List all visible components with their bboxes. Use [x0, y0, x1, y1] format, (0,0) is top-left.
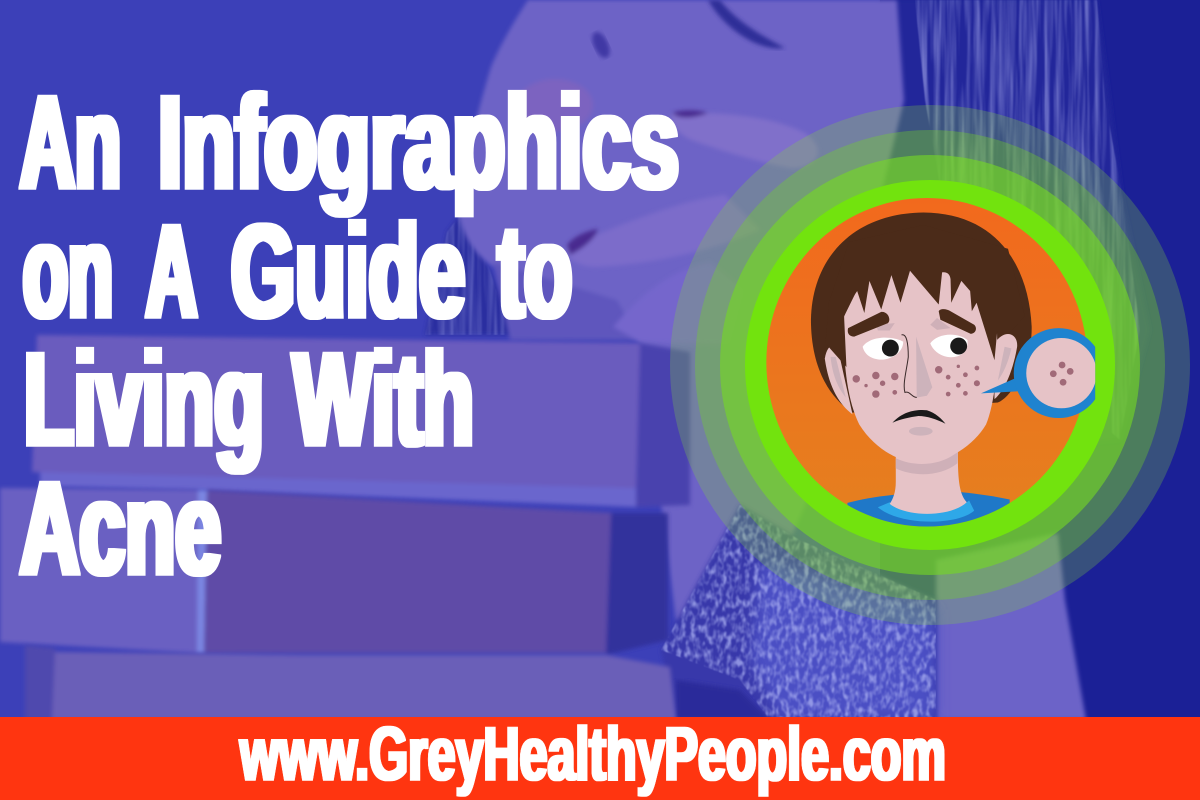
- title line 1: Infographics: [158, 69, 679, 217]
- photo: closed eye lashes: [708, 0, 785, 48]
- neck: [890, 448, 967, 514]
- footer bar: [0, 717, 1200, 800]
- photo: dark right side: [880, 0, 1200, 720]
- acne spots: [853, 365, 980, 398]
- ears: [825, 334, 1017, 414]
- title line 2: [23, 198, 572, 346]
- hair back: [811, 213, 1032, 413]
- photo: sweater: [661, 505, 936, 720]
- title line 4: Acne: [20, 455, 221, 603]
- photo: middle box: [0, 488, 668, 655]
- title line 1: An: [20, 69, 121, 217]
- magnifier bubble: [981, 328, 1104, 418]
- title line 3: With: [293, 326, 474, 474]
- right eye: [930, 335, 968, 357]
- title line 1: [20, 69, 679, 217]
- eyebrows: [848, 309, 976, 337]
- photo: hair strands at neck: [425, 212, 520, 335]
- photo: bottom box: [25, 645, 676, 720]
- concentric green rings: [670, 105, 1190, 625]
- icon: boy with acne: [766, 198, 1104, 539]
- title line 3: Living: [24, 326, 264, 474]
- title line 2: Guide: [231, 198, 465, 346]
- left eye: [863, 338, 903, 360]
- photo: arm and shoulder: [936, 533, 1086, 720]
- title line 2: to: [498, 198, 572, 346]
- photo: top box: [32, 335, 690, 507]
- title line 2: on: [23, 198, 113, 346]
- photo: nostril: [589, 29, 613, 61]
- title: [20, 69, 679, 603]
- mouth: [892, 410, 945, 424]
- photo: hair: [840, 0, 1150, 460]
- fringe: [825, 225, 1025, 367]
- nose: [902, 335, 932, 397]
- neck shadow: [896, 452, 958, 474]
- photo: fingers: [567, 110, 818, 345]
- title line 2: A: [146, 198, 197, 346]
- photo: face and neck: [459, 0, 904, 620]
- head: [844, 258, 997, 463]
- orange disc: [766, 198, 1087, 527]
- eyebrow shadows: [876, 318, 951, 331]
- shirt: [847, 492, 1010, 526]
- lip shadow: [909, 427, 933, 436]
